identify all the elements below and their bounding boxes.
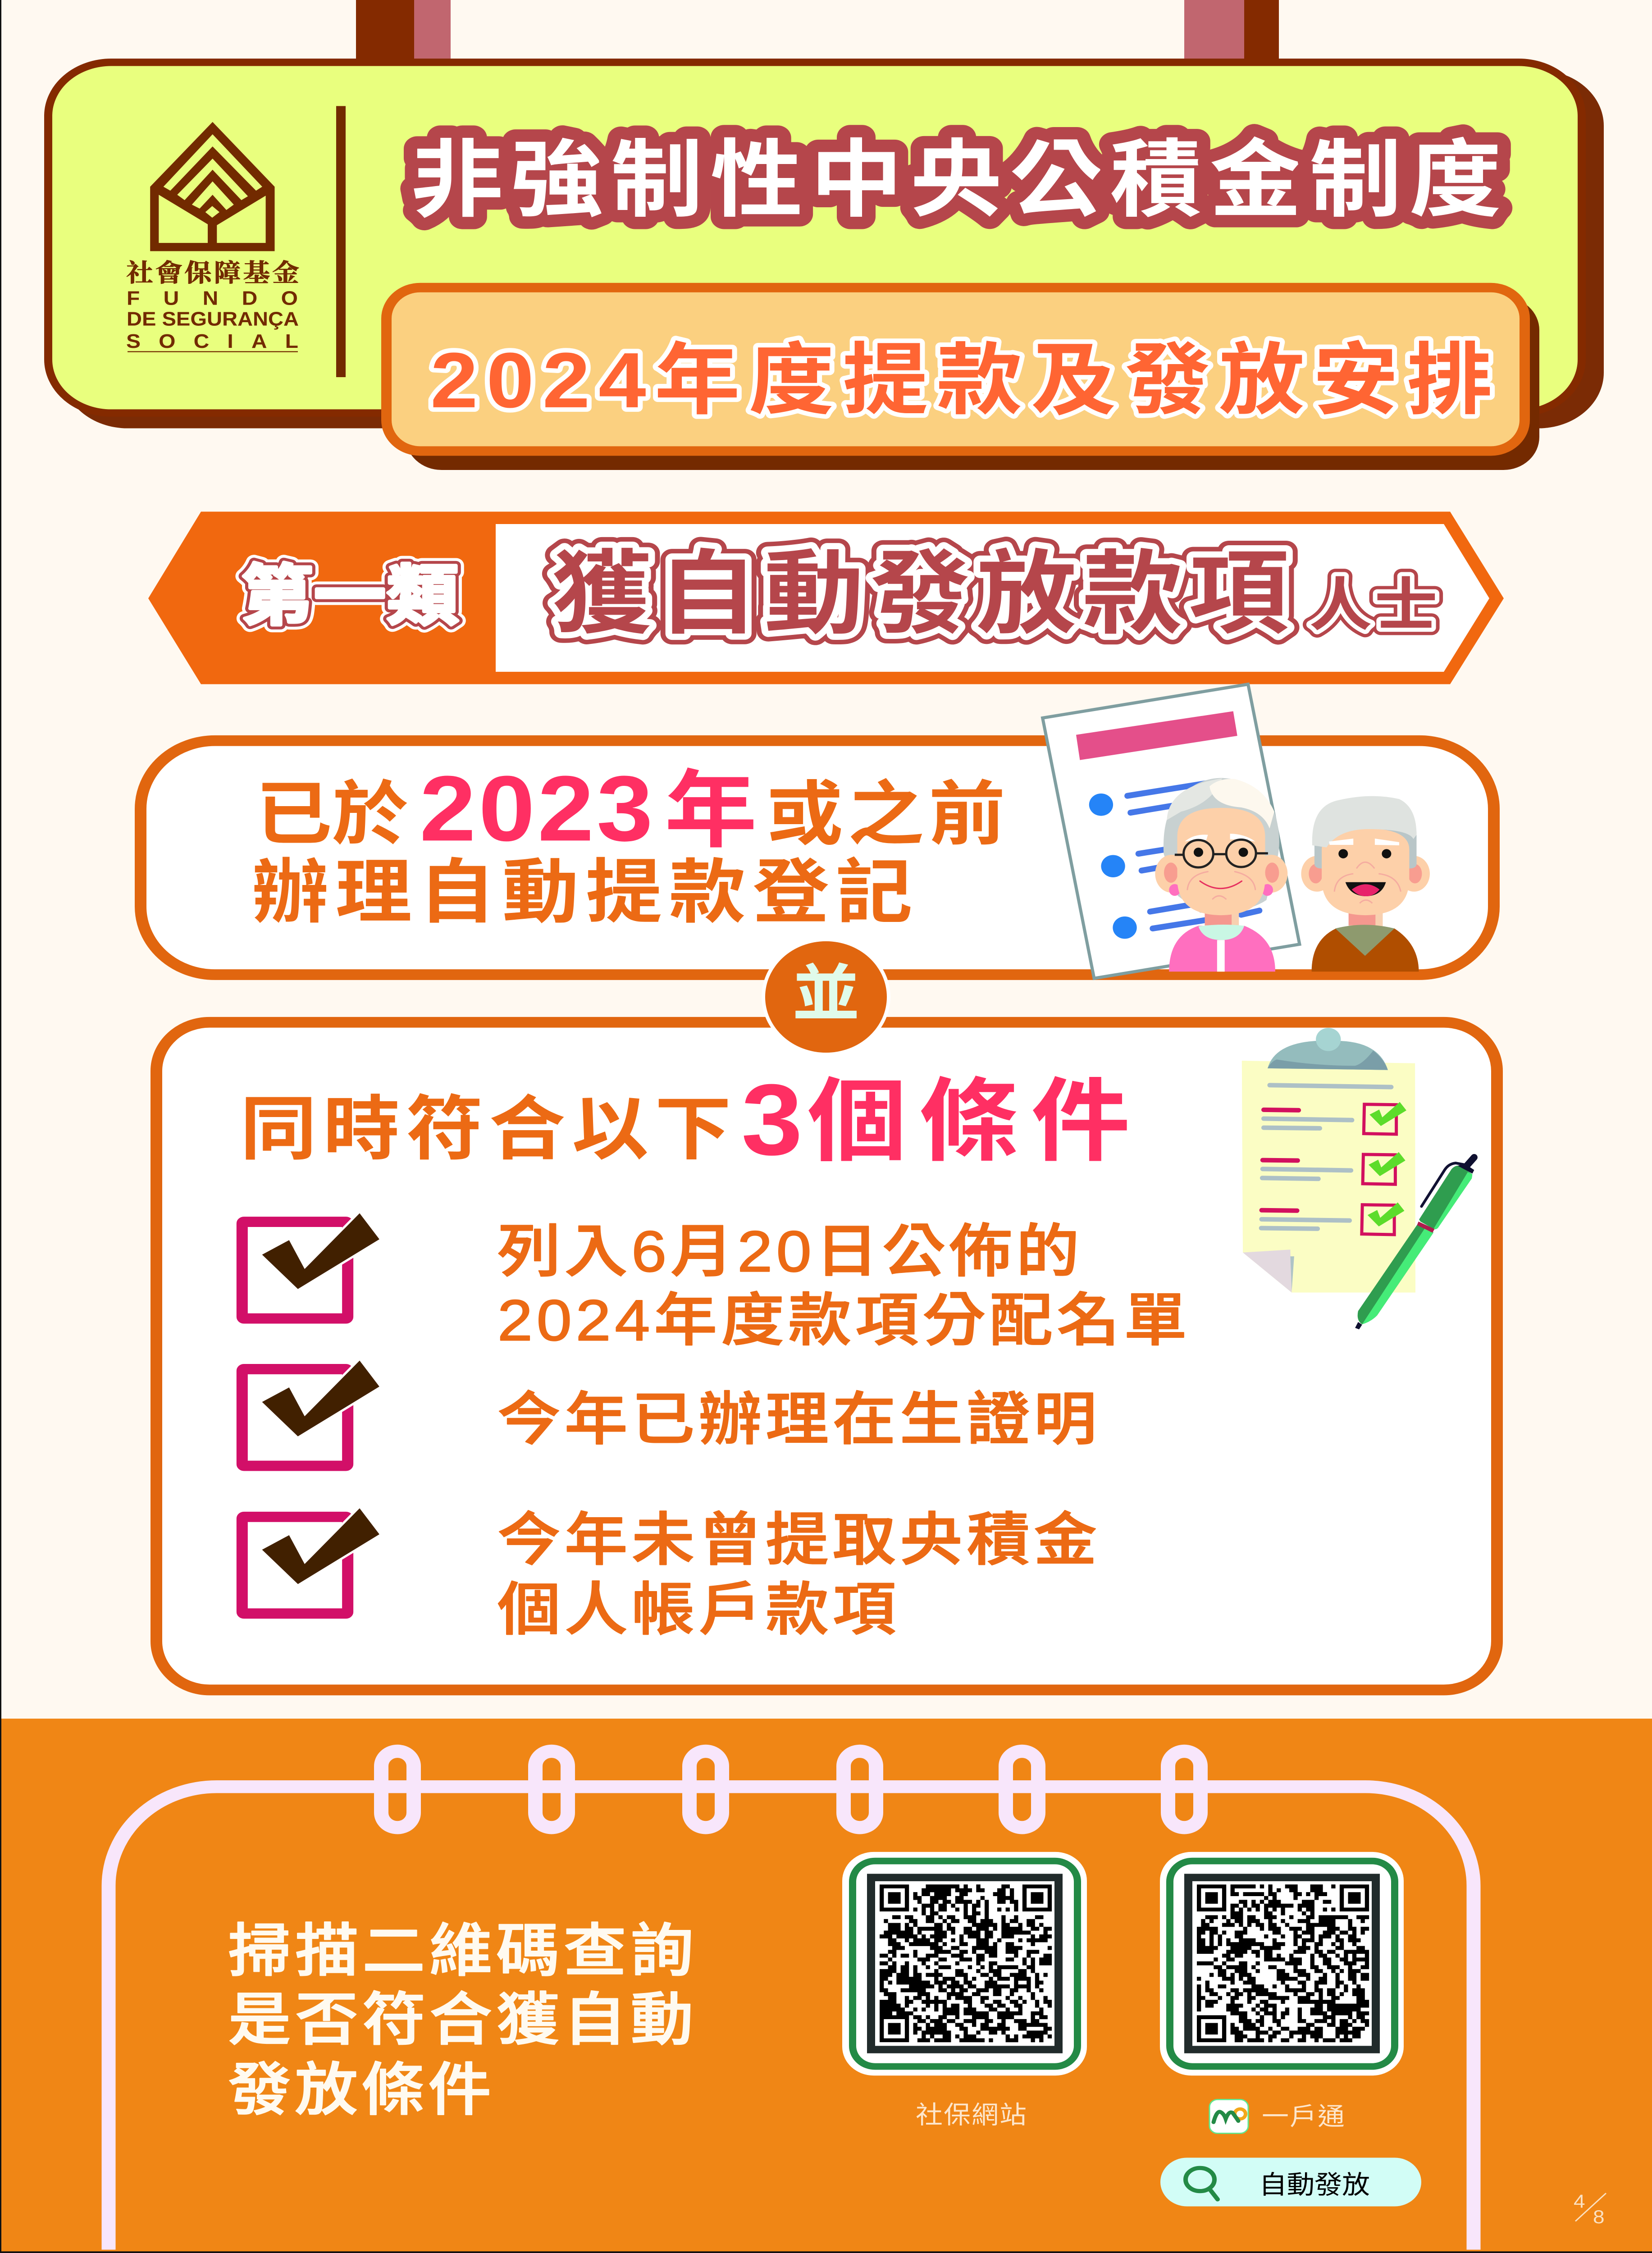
text: registered in 2023 or earlier: 或之前 [767, 775, 1005, 853]
page number [1574, 2191, 1606, 2228]
category heading: 人士 [1309, 573, 1438, 638]
subtitle: 2024年度提款及發放安排 [430, 336, 1492, 424]
text: condition 3: 個人帳戶款項 [497, 1578, 896, 1642]
category label: 第一類 [241, 559, 459, 633]
category heading: 人士 [1309, 573, 1438, 638]
text: condition 3: 今年未曾提取央積金 [497, 1508, 1097, 1572]
panel: three conditions [156, 1022, 1497, 1690]
text: condition 1: 列入6月20日公佈的 [497, 1219, 1079, 1284]
category label: 第一類 [241, 559, 459, 633]
illustration: clipboard and pen [1242, 1028, 1474, 1329]
category heading: 獲自動發放款項 [552, 543, 1289, 645]
icon: document [1043, 684, 1300, 978]
page number: 8 [1593, 2207, 1605, 2228]
text: registered in 2023 or earlier: 已於 [256, 775, 408, 853]
text: scan QR code prompt: 發放條件 [228, 2058, 491, 2122]
category heading: 獲自動發放款項 [552, 543, 1289, 645]
icon: pen [1355, 1157, 1474, 1329]
text: scan QR code prompt: 是否符合獲自動 [228, 1988, 694, 2052]
icon: magnifier [1186, 2168, 1218, 2199]
title: 非強制性中央公積金制度 [411, 132, 1501, 227]
text: condition 1 [497, 1219, 1187, 1353]
category heading: 獲自動發放款項 [552, 543, 1289, 645]
icon: social security fund logo: DE SEGURANÇA [127, 307, 299, 330]
connector badge: and: 並 [792, 960, 860, 1028]
heading: meet the following 3 conditions: 同時符合以下 [240, 1090, 731, 1168]
panel: header board [48, 62, 1604, 429]
category heading: 人士 [1309, 573, 1438, 638]
QR card: Macao One Account [1160, 1852, 1404, 2075]
QR code modules [1197, 1884, 1369, 2042]
text: registered in 2023 or earlier: 年 [665, 763, 757, 858]
text: condition 3 [497, 1508, 1097, 1642]
text: registered in 2023 or earlier: 2023 [420, 757, 653, 860]
icon: social security fund logo: 社會保障基金 [126, 253, 299, 289]
icon: checkbox 1 [242, 1212, 381, 1318]
page number: 4 [1574, 2191, 1585, 2212]
text: registered in 2023 or earlier: 辦理自動提款登記 [252, 853, 913, 931]
text: scan QR code prompt: 掃描二維碼查詢 [228, 1919, 694, 1983]
panel: subtitle plate [387, 287, 1539, 470]
icon: grandmother [1155, 778, 1287, 971]
text: registered in 2023 or earlier [252, 757, 1005, 931]
panel: registration requirement [141, 684, 1494, 978]
icon: social security fund logo [126, 122, 299, 352]
heading: meet the following 3 conditions [240, 1063, 1130, 1176]
text: scan QR code prompt [228, 1919, 694, 2122]
heading: meet the following 3 conditions: 個條件 [808, 1071, 1130, 1172]
heading: meet the following 3 conditions: 3 [741, 1063, 803, 1176]
connector badge: and [762, 938, 890, 1056]
category label: 第一類 [241, 559, 459, 633]
text: condition 2: 今年已辦理在生證明 [497, 1387, 1097, 1452]
icon: checkbox 3 [242, 1506, 381, 1614]
icon: app logo [1209, 2099, 1248, 2133]
panel: category arrow banner [148, 512, 1504, 684]
panel: calendar frame [109, 1751, 1474, 2250]
label: website: 社保網站 [916, 2102, 1027, 2129]
icon: social security fund logo: SOCIAL [126, 330, 298, 352]
text: condition 1: 2024年度款項分配名單 [497, 1288, 1187, 1353]
search pill: 自動發放 [1259, 2171, 1370, 2199]
calendar rings [381, 1751, 1200, 1828]
hanging straps [356, 0, 1279, 62]
label: one account: 一戶通 [1262, 2103, 1345, 2131]
footer band [0, 1719, 1652, 2253]
QR card: social security website [842, 1852, 1087, 2075]
search pill [1160, 2157, 1421, 2207]
icon: checkbox 2 [242, 1359, 381, 1466]
icon: social security fund logo: FUNDO [127, 287, 298, 309]
illustration: document and elderly couple [1043, 684, 1430, 978]
icon: grandfather [1301, 796, 1430, 971]
QR code modules [880, 1884, 1052, 2042]
